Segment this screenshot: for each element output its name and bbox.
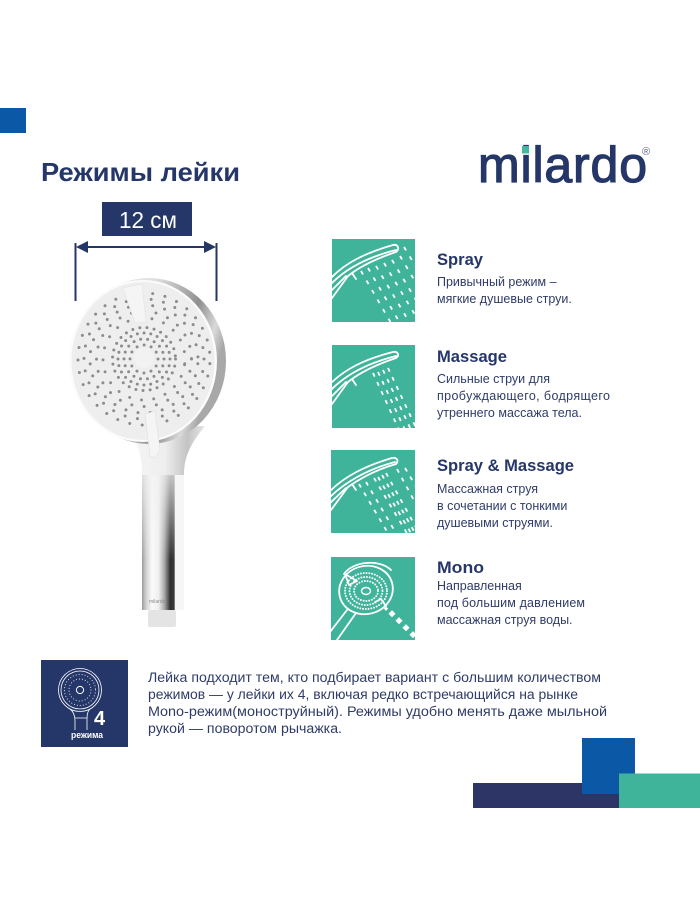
description: в сочетании с тонкими <box>437 499 567 513</box>
description: Массажная струя <box>437 482 538 496</box>
description: массажная струя воды. <box>437 613 573 627</box>
panel: Mono <box>330 557 585 640</box>
body paragraph: режимов — у лейки их 4, включая редко встречающийся на рынке <box>148 687 578 702</box>
top lever <box>123 284 146 323</box>
bottom lever <box>145 411 160 458</box>
decorative corner blocks <box>473 738 700 808</box>
dimension badge: 12 см: 12 см <box>119 207 177 233</box>
badge: 4 режима <box>41 660 128 747</box>
heading: Spray & Massage <box>437 456 574 475</box>
center hub <box>134 348 154 368</box>
number 4: 4 <box>94 708 106 730</box>
description: пробуждающего, бодрящего <box>437 389 610 403</box>
heading: Mono <box>437 558 484 577</box>
title: Режимы лейки <box>41 157 240 187</box>
heading: Spray <box>437 250 484 269</box>
body paragraph: рукой — поворотом рычажка. <box>148 721 342 736</box>
handle <box>142 465 175 610</box>
connector <box>148 610 176 627</box>
panel: Massage <box>330 345 610 432</box>
neck <box>125 426 205 475</box>
description: утреннего массажа тела. <box>437 406 582 420</box>
icon: massage mode <box>332 345 415 428</box>
head rim <box>72 278 226 444</box>
heading: Massage <box>437 347 507 366</box>
dimension badge: 12 см <box>102 202 192 236</box>
product: shower head with handle <box>69 278 226 627</box>
icon: spray and massage mode <box>331 450 415 533</box>
description: Привычный режим – <box>437 275 557 289</box>
nozzle face <box>72 282 214 440</box>
logo: milardo: ® <box>642 146 650 158</box>
icon: shower head outline <box>58 668 102 730</box>
description: мягкие душевые струи. <box>437 292 572 306</box>
panel: Spray & Massage <box>329 450 574 540</box>
description: душевыми струями. <box>437 516 553 530</box>
body paragraph: Лейка подходит тем, кто подбирает вариант с большим количеством <box>148 670 601 685</box>
panel: Spray <box>330 239 572 330</box>
body paragraph <box>148 670 607 736</box>
label: режима <box>71 730 104 740</box>
icon: mono mode <box>330 557 417 640</box>
description: под большим давлением <box>437 596 585 610</box>
description: Сильные струи для <box>437 372 550 386</box>
description: Направленная <box>437 579 522 593</box>
product: shower head with handle: milardo <box>149 599 166 605</box>
body paragraph: Mono-режим(моноструйный). Режимы удобно менять даже мыльной <box>148 704 607 719</box>
logo: milardo: milardo <box>478 137 647 193</box>
dimension arrow <box>74 241 218 301</box>
decorative corner square <box>0 108 26 133</box>
nozzle dots <box>74 289 214 429</box>
icon: spray mode <box>332 239 415 322</box>
